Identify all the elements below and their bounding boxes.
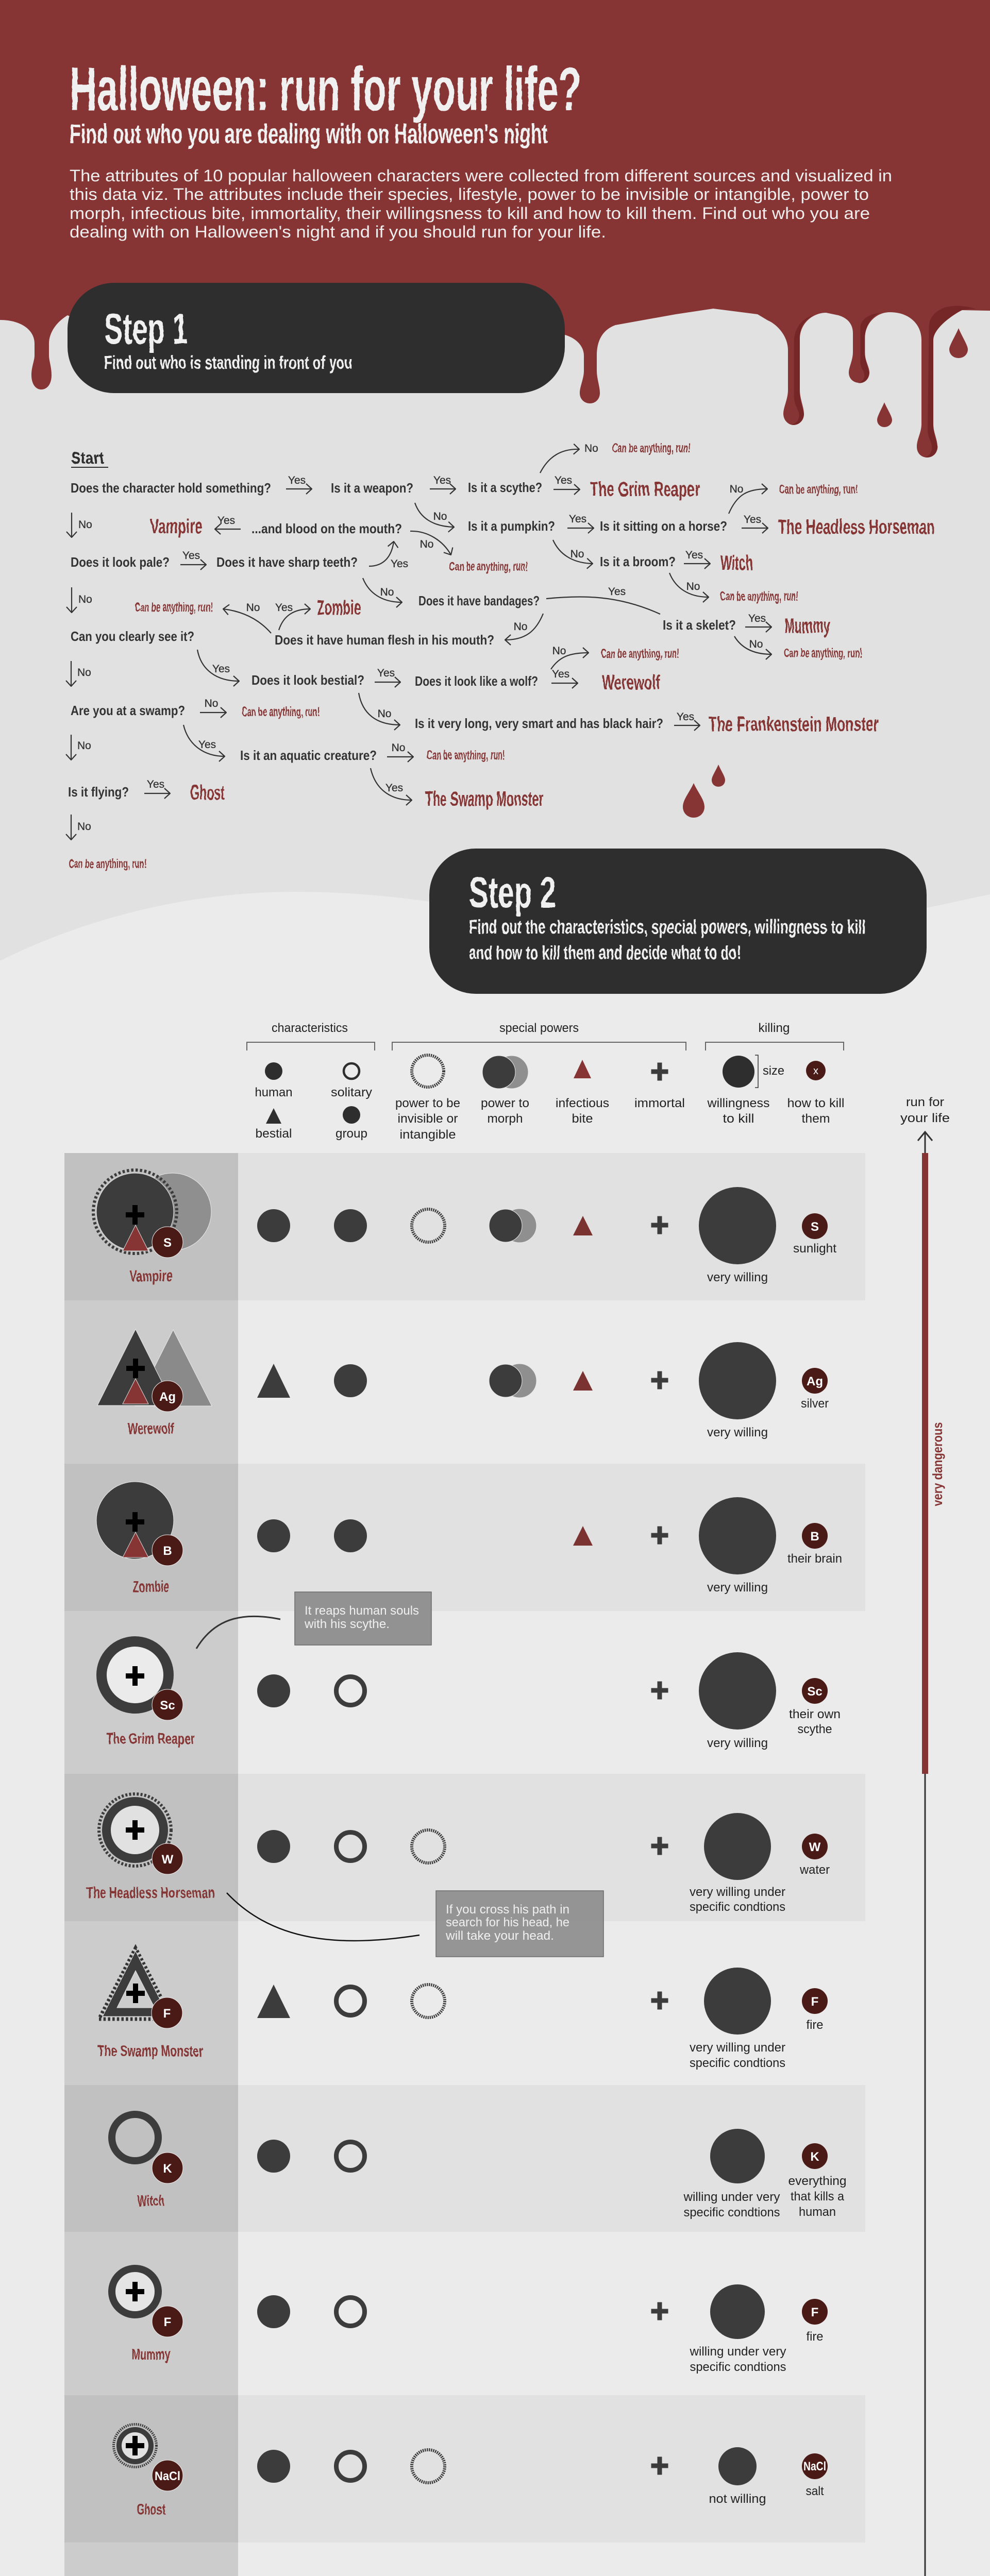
drop [683, 783, 704, 818]
row: mummy: willing under very [689, 2345, 786, 2359]
no arrow [200, 698, 226, 713]
yes arrow [684, 549, 710, 564]
no arrow [415, 503, 454, 527]
no arrow [410, 531, 451, 555]
legend group: characteristics: group [335, 1127, 367, 1141]
legend group: killing: to kill [723, 1112, 754, 1126]
yes arrow [144, 778, 170, 793]
flowchart [68, 441, 935, 871]
yes arrow: Yes [555, 474, 572, 486]
question: flying: Is it flying? [68, 784, 129, 800]
row: zombie: very willing [707, 1581, 768, 1595]
result: Can be anything, run! [612, 441, 691, 455]
question: pumpkin: Is it a pumpkin? [468, 518, 555, 534]
character icon: swamp monster [99, 1948, 182, 2028]
callout: headless horseman [436, 1891, 603, 1957]
callout: grim reaper [295, 1592, 431, 1645]
callout line: grim reaper [196, 1616, 280, 1649]
drop [949, 328, 968, 358]
yes connector: Yes [608, 586, 626, 598]
character icon: werewolf [97, 1329, 212, 1412]
answer: werewolf: Werewolf [602, 671, 660, 694]
yes arrow [745, 613, 771, 627]
question: bandages: Does it have bandages? [418, 593, 540, 608]
yes arrow [674, 711, 700, 725]
legend group: special powers: invisible or [398, 1112, 458, 1126]
character icon: vampire: S [163, 1236, 172, 1250]
answer: ghost: Ghost [190, 782, 225, 804]
intro paragraph: The attributes of 10 popular halloween characters were collected from different sources and visualized in [70, 166, 892, 185]
row: witch: human [799, 2205, 836, 2219]
yes arrow: Yes [147, 778, 164, 790]
yes arrow [369, 541, 408, 570]
start label: Start [71, 448, 104, 467]
row: swamp monster: fire [806, 2018, 824, 2032]
callout: headless horseman: search for his head, he [446, 1916, 569, 1929]
yes connector [546, 586, 660, 614]
row: witch: everything [788, 2174, 846, 2188]
yes arrow: Yes [212, 663, 230, 675]
result: Can be anything, run! [449, 560, 528, 574]
yes arrow: Yes [288, 474, 306, 486]
yes arrow [371, 768, 412, 800]
callout: grim reaper: It reaps human souls [305, 1604, 419, 1618]
no arrow: No [730, 483, 743, 495]
character icon: mummy [112, 2268, 183, 2337]
legend group: characteristics: solitary [331, 1086, 372, 1099]
row: mummy: F [811, 2306, 818, 2319]
row: witch: that kills a [791, 2190, 845, 2204]
no arrow: No [420, 538, 433, 550]
no arrow: No [205, 698, 218, 709]
legend group: special powers: morph [488, 1112, 523, 1126]
lower background wave [0, 892, 990, 2576]
legend group: killing: willingness [707, 1096, 770, 1110]
drop [877, 402, 892, 427]
yes arrow: Yes [552, 668, 569, 680]
header blood drips [0, 0, 990, 457]
question: swamp: Are you at a swamp? [71, 703, 185, 718]
legend group: killing: them [802, 1112, 830, 1126]
character icon: ghost: NaCl [155, 2469, 180, 2483]
row: vampire: sunlight [793, 1242, 836, 1256]
character icon: grim reaper [102, 1641, 183, 1720]
yes arrow: Yes [569, 513, 586, 525]
step 1 panel [68, 283, 565, 393]
yes arrow: Yes [182, 550, 200, 562]
question: wolf: Does it look like a wolf? [415, 673, 538, 689]
answer: witch: Witch [720, 552, 753, 574]
no down arrow: No [77, 667, 91, 679]
name: The Swamp Monster [98, 2042, 203, 2060]
row: ghost [64, 2395, 865, 2543]
question: bestial: Does it look bestial? [251, 672, 364, 688]
subtitle: Find out who you are dealing with on Halloween's night [70, 118, 548, 149]
legend group: killing [706, 1021, 844, 1126]
no arrow [729, 483, 767, 514]
no arrow [359, 693, 400, 725]
answer: grim reaper: The Grim Reaper [590, 478, 700, 501]
yes arrow [742, 514, 768, 528]
yes arrow [553, 474, 580, 489]
legend group: special powers [392, 1021, 686, 1142]
no down arrow [71, 815, 91, 840]
name: Vampire [130, 1267, 172, 1285]
result: Can be anything, run! [242, 705, 320, 719]
no arrow: No [433, 511, 447, 522]
row: headless horseman: very willing under [690, 1885, 785, 1899]
answer: vampire: Vampire [150, 515, 203, 538]
callout: headless horseman: will take your head. [445, 1929, 554, 1943]
row: witch [64, 2085, 865, 2232]
row: headless horseman [64, 1774, 865, 1921]
no arrow: No [380, 586, 394, 598]
yes arrow [375, 667, 400, 682]
yes arrow [197, 650, 239, 681]
yes arrow [183, 725, 225, 756]
step 1 panel: Find out who is standing in front of you [104, 352, 353, 373]
row: swamp monster: F [811, 1995, 818, 2009]
result: Can be anything, run! [784, 646, 862, 660]
no down arrow [72, 513, 92, 537]
axis: run for your life: very dangerous [930, 1422, 945, 1506]
character icon: mummy: F [164, 2315, 171, 2329]
question: sharp teeth: Does it have sharp teeth? [216, 554, 358, 570]
legend group: killing: x [813, 1065, 818, 1077]
answer: mummy: Mummy [784, 615, 830, 637]
row: headless horseman: W [809, 1840, 821, 1854]
yes arrow: Yes [744, 514, 761, 526]
no arrow: No [552, 645, 566, 657]
name: Ghost [136, 2500, 166, 2518]
answer: frankenstein monster: The Frankenstein Monster [709, 713, 879, 736]
row: swamp monster [64, 1921, 828, 2085]
row: ghost: not willing [709, 2492, 766, 2506]
name: Witch [137, 2192, 165, 2210]
no down arrow [72, 587, 92, 613]
character icon: witch: K [163, 2162, 172, 2176]
callout line: headless horseman [227, 1893, 420, 1941]
row: swamp monster: very willing under [690, 2041, 785, 2055]
row: grim reaper: scythe [798, 1722, 832, 1736]
question: clearly see: Can you clearly see it? [71, 629, 194, 644]
row: vampire: very willing [707, 1270, 768, 1284]
row: werewolf: silver [801, 1397, 829, 1411]
legend group: special powers: intangible [400, 1128, 456, 1142]
legend group: special powers: immortal [634, 1096, 685, 1110]
legend group: characteristics: bestial [256, 1127, 292, 1141]
character icon: zombie: B [163, 1544, 172, 1558]
yes arrow: Yes [433, 474, 451, 486]
no arrow: No [749, 638, 763, 650]
axis: run for your life: run for [906, 1095, 944, 1109]
character icon: swamp monster: F [163, 2007, 171, 2021]
intro paragraph: this data viz. The attributes include their species, lifestyle, power to be invisible or intangible, power to [70, 185, 869, 204]
no arrow [540, 443, 598, 473]
step 2 panel [429, 849, 927, 994]
no arrow: No [686, 581, 700, 592]
axis: run for your life [896, 1095, 954, 2576]
character icon: werewolf: Ag [159, 1390, 176, 1404]
no arrow [387, 742, 413, 757]
yes arrow [567, 513, 594, 528]
no down arrow: No [78, 594, 92, 605]
legend group: characteristics [247, 1021, 375, 1141]
legend group: special powers: power to [481, 1096, 529, 1110]
step 2 panel: Step 2 [469, 868, 556, 917]
no arrow [734, 636, 771, 654]
yes arrow: Yes [377, 667, 395, 679]
legend group: characteristics: human [255, 1086, 293, 1099]
yes arrow: Yes [391, 558, 408, 570]
yes arrow [286, 474, 312, 489]
legend group: special powers: bite [572, 1112, 593, 1126]
character icon: ghost [113, 2425, 183, 2491]
row: headless horseman: specific condtions [690, 1900, 785, 1914]
title: Halloween: run for your life? [70, 55, 581, 124]
name: Mummy [132, 2345, 171, 2363]
yes arrow: Yes [198, 739, 216, 751]
question: blood: ...and blood on the mouth? [251, 521, 402, 536]
question: scythe: Is it a scythe? [468, 480, 542, 495]
question: weapon: Is it a weapon? [331, 480, 413, 496]
axis: run for your life: your life [900, 1111, 950, 1125]
character icon: witch [112, 2114, 183, 2183]
intro paragraph: morph, infectious bite, immortality, their willingsness to kill and how to kill them. Find out who you are [70, 204, 870, 223]
yes arrow: Yes [275, 602, 293, 614]
row: zombie: B [810, 1530, 819, 1544]
question: aquatic: Is it an aquatic creature? [240, 748, 377, 763]
no arrow: No [514, 621, 527, 633]
no arrow [669, 573, 709, 597]
character icon: headless horseman [99, 1794, 183, 1874]
no down arrow: No [78, 519, 92, 531]
character icon: vampire [93, 1170, 211, 1258]
yes arrow [180, 550, 206, 565]
legend group: characteristics: characteristics [272, 1021, 348, 1035]
legend group: killing: killing [759, 1021, 790, 1035]
no arrow [363, 578, 402, 602]
row: witch: K [810, 2150, 819, 2164]
result: Can be anything, run! [779, 482, 858, 497]
row: headless horseman: water [799, 1863, 830, 1877]
no arrow: No [570, 548, 584, 560]
question: hold something: Does the character hold something? [71, 480, 271, 496]
row: grim reaper: Sc [807, 1685, 823, 1699]
legend group: special powers: power to be [395, 1096, 460, 1110]
row: werewolf: very willing [707, 1426, 768, 1439]
question: long hair: Is it very long, very smart and has black hair? [415, 716, 663, 731]
name: Werewolf [128, 1419, 174, 1437]
yes arrow [430, 474, 456, 489]
no arrow [553, 540, 593, 564]
question: skelet: Is it a skelet? [663, 617, 736, 633]
result: Can be anything, run! [69, 857, 147, 871]
question: human flesh: Does it have human flesh in his mouth? [275, 632, 494, 648]
row: grim reaper [64, 1611, 841, 1774]
row: witch: specific condtions [683, 2206, 780, 2219]
row: frankenstein monster [64, 2543, 828, 2576]
drop [712, 765, 725, 787]
legend group: special powers: infectious [556, 1096, 609, 1110]
name: The Headless Horseman [87, 1884, 214, 1902]
character icon: grim reaper: Sc [160, 1699, 175, 1713]
legend group: special powers: special powers [499, 1021, 579, 1035]
no down arrow: No [77, 821, 91, 833]
intro paragraph: dealing with on Halloween's night and if you should run for your life. [70, 223, 606, 241]
result: Can be anything, run! [601, 647, 679, 661]
result: Can be anything, run! [720, 589, 798, 604]
row: ghost: salt [806, 2484, 824, 2498]
question: horse: Is it sitting on a horse? [600, 518, 727, 534]
character icon: headless horseman: W [162, 1853, 174, 1867]
step 2 panel: and how to kill them and decide what to do! [469, 942, 741, 964]
intro paragraph [70, 166, 892, 241]
no arrow [551, 645, 589, 669]
no arrow: No [378, 708, 391, 720]
no arrow [223, 602, 271, 633]
callout: headless horseman: If you cross his path in [446, 1903, 569, 1917]
row: zombie: their brain [787, 1552, 842, 1566]
row: grim reaper: very willing [707, 1736, 768, 1750]
answer: swamp monster: The Swamp Monster [425, 788, 544, 810]
no arrow [505, 614, 543, 640]
row: vampire [64, 1153, 865, 1300]
row: mummy: specific condtions [690, 2360, 786, 2374]
result: Can be anything, run! [135, 600, 213, 615]
legend group: killing: how to kill [787, 1096, 844, 1110]
answer: zombie: Zombie [317, 597, 361, 619]
yes arrow: Yes [748, 613, 766, 624]
character icon: zombie [96, 1482, 183, 1566]
result: Can be anything, run! [427, 748, 505, 762]
yes arrow [551, 668, 578, 683]
callout: grim reaper: with his scythe. [304, 1617, 390, 1631]
yes arrow: Yes [217, 515, 235, 527]
yes arrow: Yes [385, 782, 403, 794]
row: mummy [64, 2232, 828, 2395]
name: Zombie [133, 1578, 169, 1596]
yes arrow: Yes [685, 549, 703, 561]
name: The Grim Reaper [106, 1730, 195, 1748]
no down arrow [71, 735, 91, 760]
no down arrow: No [77, 740, 91, 752]
no arrow: No [392, 742, 405, 754]
row: witch: willing under very [683, 2190, 780, 2204]
step 1 panel: Step 1 [104, 304, 188, 353]
no down arrow [71, 661, 91, 686]
row: werewolf [64, 1300, 829, 1464]
yes arrow [215, 515, 241, 529]
row: swamp monster: specific condtions [690, 2056, 785, 2070]
yes arrow [275, 602, 310, 630]
row: vampire: S [811, 1220, 819, 1234]
row: ghost: NaCl [803, 2460, 826, 2473]
row: zombie [64, 1464, 865, 1611]
legend group: killing: size [763, 1064, 784, 1078]
question: pale: Does it look pale? [71, 554, 170, 570]
no arrow: No [584, 443, 598, 454]
row: werewolf: Ag [807, 1375, 823, 1388]
question: broom: Is it a broom? [600, 554, 676, 569]
row: mummy: fire [806, 2330, 824, 2344]
yes arrow: Yes [677, 711, 694, 723]
no arrow: No [246, 602, 260, 614]
row: grim reaper: their own [789, 1707, 841, 1721]
legend [247, 1021, 844, 1142]
